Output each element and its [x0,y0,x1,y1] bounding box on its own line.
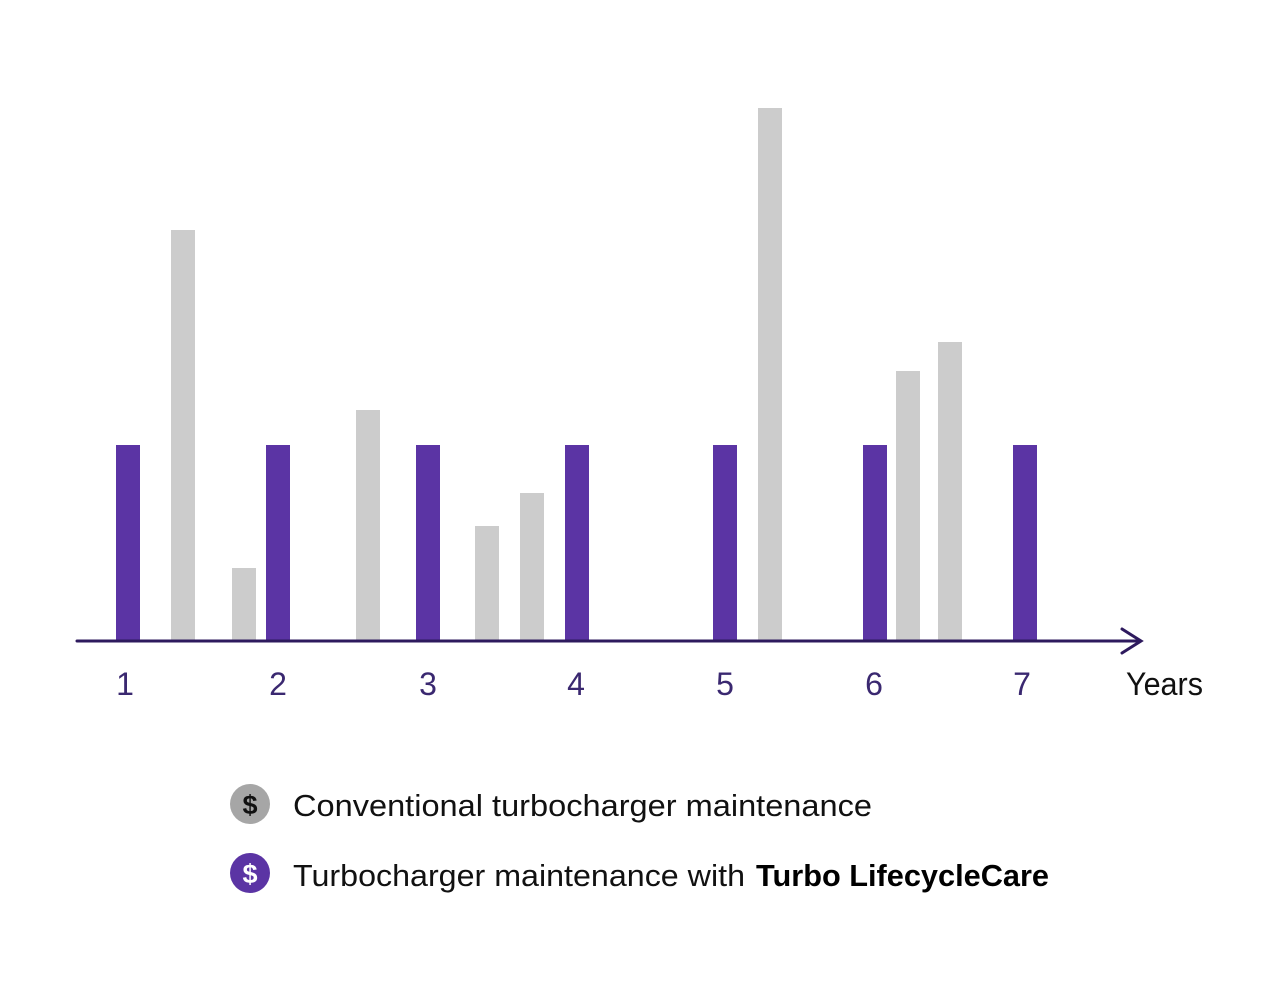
legend: Turbo LifecycleCare: Turbocharger maintenance with [293,858,745,893]
legend: Turbo LifecycleCare [230,853,1049,893]
year labels [116,666,1031,702]
bars: turbocharger maintenance with Turbo LifecycleCare [116,445,1037,641]
x axis arrow [77,629,1141,653]
year labels: 6 [865,666,883,702]
year labels: 3 [419,666,437,702]
year labels: 2 [269,666,287,702]
year labels: 7 [1013,666,1031,702]
legend: conventional: Conventional turbocharger maintenance [293,788,872,823]
legend: Turbo LifecycleCare: Turbo LifecycleCare [756,858,1049,893]
year labels: 4 [567,666,585,702]
legend: conventional: $ [242,790,258,820]
axis title: Years [1126,666,1203,702]
legend: Turbo LifecycleCare: $ [242,859,258,889]
bars: conventional maintenance [171,108,962,641]
year labels: 5 [716,666,734,702]
year labels: 1 [116,666,134,702]
